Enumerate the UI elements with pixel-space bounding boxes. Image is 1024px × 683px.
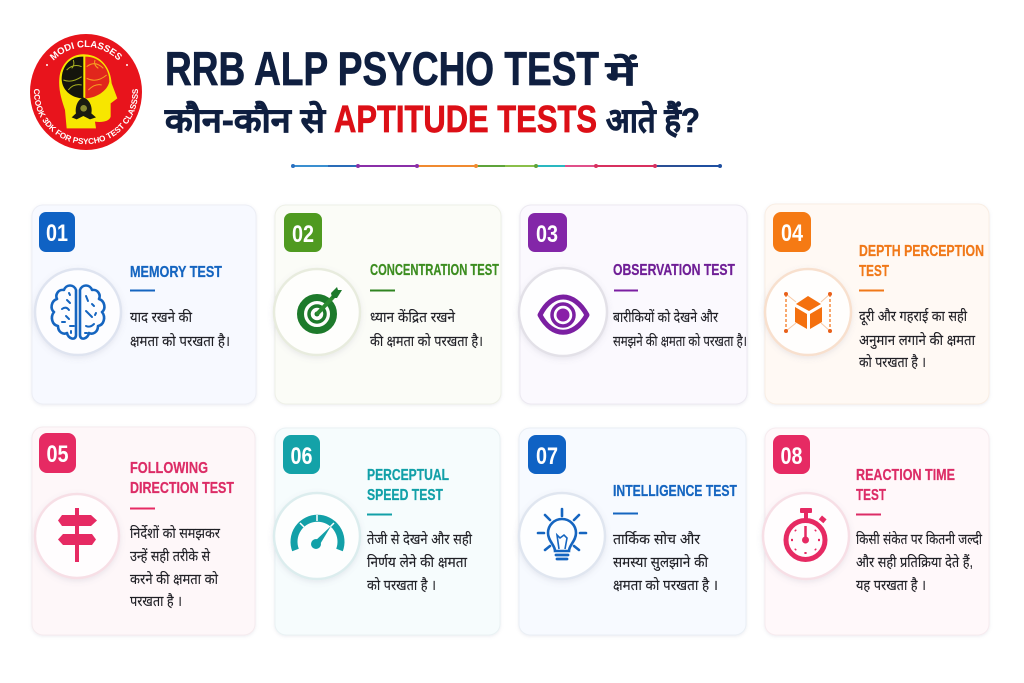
description: क्षमता को परखता है। — [130, 333, 230, 350]
badge 05 — [39, 433, 76, 473]
heading: PERCEPTUAL — [367, 467, 449, 484]
title: कौन-कौन से — [164, 100, 326, 140]
description — [856, 531, 982, 594]
logo: CCOOK 3DK FOR PSYCHO TEST CLASSSS — [34, 89, 138, 144]
description — [613, 309, 747, 350]
heading: DEPTH PERCEPTION — [859, 243, 984, 260]
icon: target — [274, 269, 360, 355]
colour divider — [291, 164, 722, 168]
heading — [856, 467, 955, 504]
rule — [856, 514, 881, 516]
description: बारीकियों को देखने और — [613, 309, 719, 326]
badge 03 — [528, 213, 567, 252]
description: समझने की क्षमता को परखता है। — [613, 333, 747, 350]
title: RRB ALP PSYCHO TEST — [165, 42, 599, 95]
badge 07: 07 — [536, 443, 558, 470]
heading — [367, 467, 449, 504]
badge 02: 02 — [292, 221, 314, 248]
title: आते हैं? — [606, 100, 700, 140]
rule — [370, 290, 395, 292]
icon: brain — [35, 269, 121, 355]
rule — [859, 290, 884, 292]
title: APTITUDE TESTS — [334, 99, 597, 141]
title — [164, 42, 700, 141]
description: तेजी से देखने और सही — [367, 531, 472, 548]
badge 06: 06 — [290, 443, 312, 470]
heading: FOLLOWING — [130, 460, 208, 477]
icon: eye — [519, 268, 607, 356]
panel: 07 intelligence test — [519, 428, 746, 635]
icon: gauge — [274, 493, 360, 579]
badge 02 — [284, 213, 322, 252]
badge 04 — [773, 212, 811, 252]
description — [130, 309, 230, 350]
heading: TEST — [856, 487, 886, 504]
description: करने की क्षमता को — [130, 571, 218, 588]
heading: TEST — [859, 263, 889, 280]
badge 03: 03 — [536, 221, 558, 248]
rule — [130, 508, 155, 510]
description — [613, 531, 718, 594]
description — [859, 308, 975, 371]
panel: 01 memory test — [32, 205, 256, 404]
description — [367, 531, 472, 594]
badge 04: 04 — [781, 220, 804, 247]
panel: 04 depth perception test — [765, 204, 989, 404]
heading: OBSERVATION TEST — [613, 262, 735, 279]
description: और सही प्रतिक्रिया देते हैं, — [856, 554, 973, 571]
panel: 02 concentration test — [274, 205, 501, 404]
heading: MEMORY TEST — [130, 264, 222, 281]
description: दूरी और गहराई का सही — [859, 308, 967, 326]
icon: signpost — [35, 494, 119, 578]
description: की क्षमता को परखता है। — [370, 333, 483, 350]
description: यह परखता है । — [856, 577, 926, 594]
heading: INTELLIGENCE TEST — [613, 483, 737, 500]
badge 08: 08 — [780, 443, 802, 470]
heading: DIRECTION TEST — [130, 480, 234, 497]
icon: bulb — [519, 493, 605, 579]
title: में — [605, 53, 638, 93]
heading — [130, 460, 234, 497]
badge 07 — [528, 435, 566, 474]
description: तार्किक सोच और — [613, 531, 701, 548]
description: याद रखने की — [130, 309, 192, 326]
description: समस्या सुलझाने की — [613, 554, 708, 571]
panel: 03 observation test — [519, 205, 747, 404]
description: को परखता है । — [859, 354, 926, 371]
description: को परखता है । — [367, 577, 436, 594]
description — [130, 525, 221, 610]
heading: REACTION TIME — [856, 467, 955, 484]
rule — [367, 514, 392, 516]
rule — [613, 512, 638, 514]
description: क्षमता को परखता है । — [613, 577, 718, 594]
description — [370, 309, 483, 350]
badge 06 — [283, 435, 320, 474]
heading — [859, 243, 984, 280]
logo — [30, 34, 142, 150]
icon: stopwatch — [763, 493, 849, 579]
description: उन्हें सही तरीके से — [130, 548, 210, 565]
description: निर्देशों को समझकर — [130, 525, 221, 542]
rule — [614, 290, 638, 292]
description: ध्यान केंद्रित रखने — [370, 309, 456, 326]
badge 01: 01 — [46, 220, 68, 247]
panel: 06 perceptual speed test — [274, 428, 500, 635]
heading: SPEED TEST — [367, 487, 443, 504]
badge 05: 05 — [46, 441, 68, 468]
heading: CONCENTRATION TEST — [370, 262, 499, 279]
description: किसी संकेत पर कितनी जल्दी — [856, 531, 982, 548]
icon: cube — [765, 269, 851, 355]
badge 01 — [39, 212, 75, 252]
badge 08 — [773, 435, 810, 474]
logo: MODI CLASSES — [50, 40, 122, 60]
description: अनुमान लगाने की क्षमता — [859, 332, 975, 349]
panel: 05 following direction test — [32, 427, 255, 635]
description: परखता है । — [130, 593, 182, 610]
description: निर्णय लेने की क्षमता — [367, 554, 467, 571]
rule — [130, 290, 155, 292]
panel: 08 reaction time test — [763, 428, 989, 635]
